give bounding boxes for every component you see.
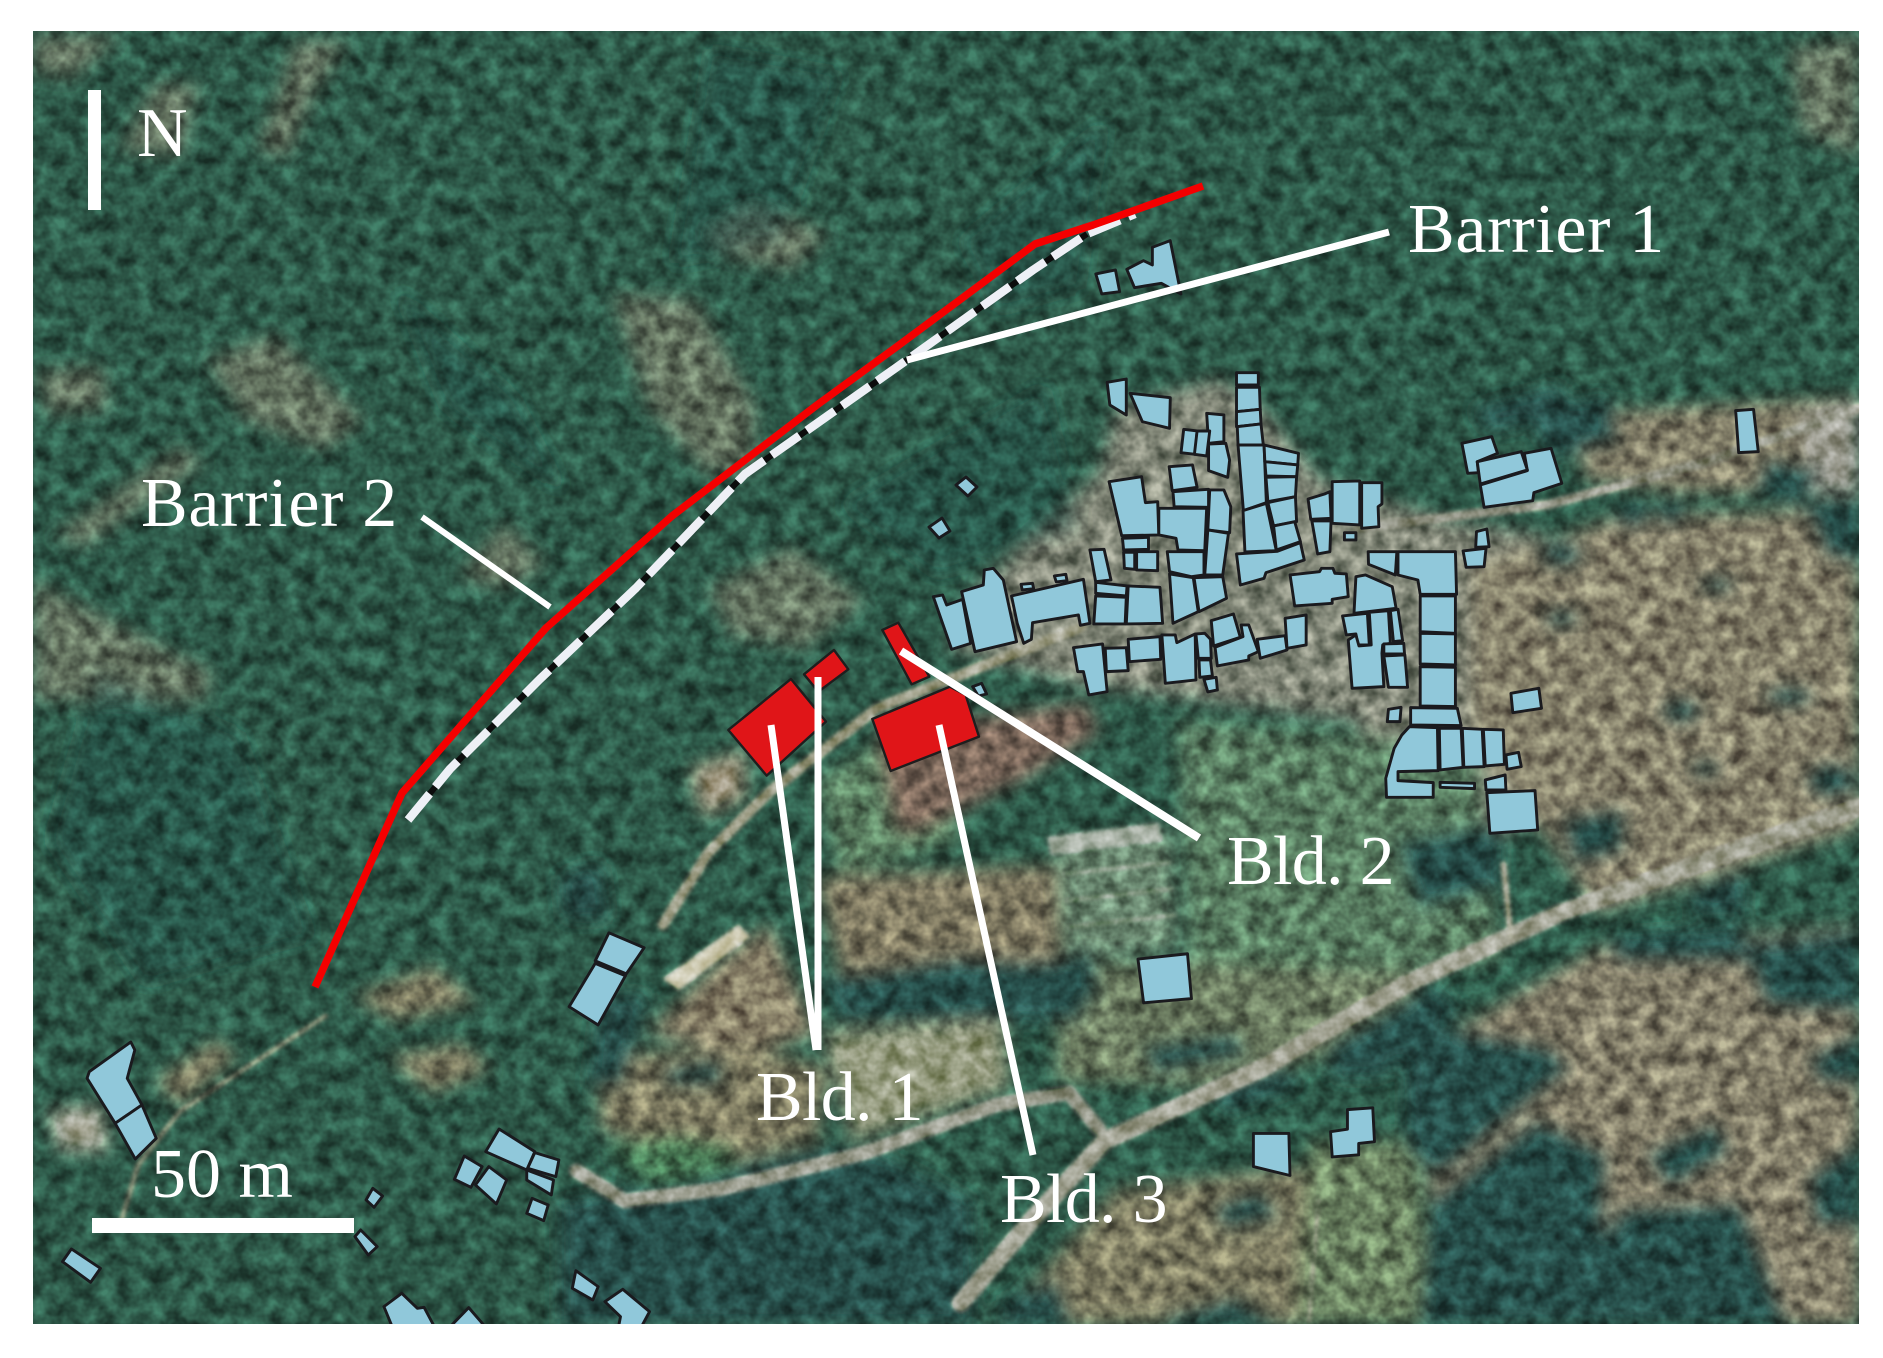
roads	[120, 408, 1859, 1321]
forest clearings	[34, 36, 1859, 700]
map labels: Bld. 2	[1227, 823, 1394, 900]
north arrow bar	[88, 90, 101, 210]
leader lines	[422, 232, 1389, 1155]
map labels: Bld. 1	[756, 1059, 923, 1136]
map labels: N	[137, 95, 188, 172]
buildings: west end of village	[929, 477, 1017, 696]
buildings: south	[569, 933, 644, 1025]
buildings: central village	[1011, 373, 1562, 833]
village ground	[949, 378, 1543, 841]
scale bar	[92, 1218, 354, 1233]
map labels	[137, 95, 1665, 1238]
bottom left clearings	[353, 967, 478, 1021]
map labels: 50 m	[151, 1136, 293, 1213]
right fields	[1471, 510, 1859, 913]
affected buildings in red	[728, 623, 979, 776]
barrier 1: dashed line	[408, 214, 1135, 820]
buildings: south-west	[62, 1042, 650, 1328]
barrier 2: red line	[315, 186, 1203, 987]
central fields	[1177, 721, 1501, 997]
buildings: north and north-east	[1096, 241, 1758, 453]
map labels: Bld. 3	[1000, 1161, 1167, 1238]
map labels: Barrier 1	[1408, 191, 1665, 268]
bright strips and greenhouse	[663, 925, 751, 991]
buildings: south-east	[1138, 954, 1374, 1175]
map labels: Barrier 2	[141, 465, 398, 542]
